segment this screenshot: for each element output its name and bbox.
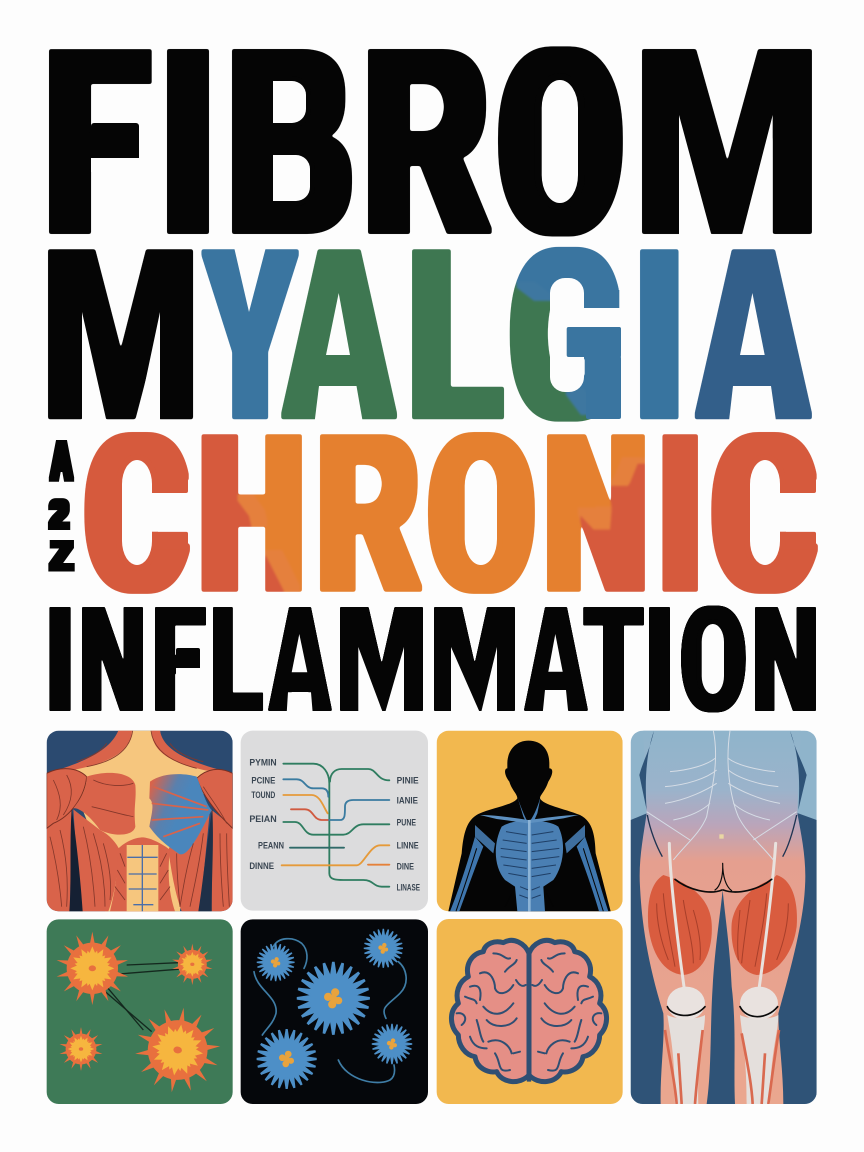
ribcage and nerves [496,820,563,911]
pectorals [73,773,136,835]
navy surround [631,813,817,1104]
immune cells [292,957,374,1039]
title line: INFLAMMATION: I [47,577,73,742]
title line: INFLAMMATION [47,576,818,743]
pathway labels: PEANN [258,840,284,850]
title line: CHRONIC: H [200,391,304,636]
pathway labels: LINASE [397,882,420,892]
title line: INFLAMMATION: L [212,578,262,742]
title line: MYALGIA: A [700,201,807,468]
pathway labels: TOUND [251,790,276,800]
pathway lines [282,764,389,887]
title line: INFLAMMATION: O [682,578,745,742]
title line: FIBROM: I [165,0,211,287]
body [640,731,805,1104]
panel: nerve pathway diagram [241,731,428,911]
pathway labels: DINNE [249,861,274,871]
title line: CHRONIC: N [546,390,646,637]
panel: inflamed cells on green [47,919,233,1104]
title line: FIBROM: R [366,0,486,287]
title line: MYALGIA: A [286,200,392,467]
pathway labels: PYMIN [249,758,277,768]
pathway labels: PINIE [397,776,419,786]
title line: CHRONIC: O [431,391,532,636]
pathway labels: PEIAN [249,814,277,824]
title line: INFLAMMATION: M [337,577,426,742]
title line: MYALGIA: M [40,201,201,467]
lower leg muscle stripes [665,1030,779,1104]
title line: CHRONIC: C [714,389,814,635]
hamstring muscles [648,875,712,975]
title line: MYALGIA: I [640,200,679,467]
arms and lats [47,810,72,911]
brain hemispheres [451,940,607,1082]
panel: brain [437,919,623,1104]
title line: FIBROM: O [501,0,620,287]
side word: small stacked letters: A [51,431,72,492]
connecting fibres [254,939,406,1082]
title line: FIBROM [47,0,822,287]
pathway labels: IANIE [397,795,418,805]
pathway labels: DINE [397,862,414,872]
pathway labels: LINNE [397,841,419,851]
title line: CHRONIC: C [87,389,186,636]
title line: INFLAMMATION: I [647,577,672,743]
fibre lines [50,731,229,907]
title line: FIBROM: B [230,0,351,287]
title line: INFLAMMATION: N [80,576,145,741]
panel: back, hamstrings and knees [631,731,817,1104]
title line: CHRONIC: I [661,390,699,636]
side word: small stacked letters [50,431,73,579]
connections between cells [104,962,190,1032]
title line: FIBROM: F [47,0,149,287]
black contour lines [667,863,778,1017]
pathway labels [249,758,420,892]
title line: INFLAMMATION: N [753,576,818,741]
title line: MYALGIA: G [513,202,620,468]
tendons and knees [669,843,776,987]
cells [56,932,129,1005]
title line: INFLAMMATION: T [586,576,641,741]
side word: small stacked letters: 2 [50,491,69,537]
panel: chest and shoulder muscles [47,731,233,911]
cream torso [67,731,210,911]
silhouette [448,741,611,911]
title line: FIBROM: M [632,0,822,286]
pathway labels: PCINE [251,775,275,785]
brain folds [457,953,601,1071]
side word: small stacked letters: Z [50,534,73,579]
title line: INFLAMMATION: A [270,577,330,742]
title line: INFLAMMATION: F [153,576,205,742]
panel: silhouette with nervous system [437,731,623,911]
pathway labels: PUNE [397,818,416,828]
title: FIBROMYALGIA AND CHRONIC INFLAMMATION [40,0,823,743]
title line: INFLAMMATION: M [431,577,518,742]
title line: CHRONIC [87,389,823,637]
deltoids [47,769,87,828]
title line: INFLAMMATION: A [526,577,586,742]
title line: MYALGIA: L [411,201,499,467]
title line: CHRONIC: R [319,389,417,636]
title line: MYALGIA: Y [208,202,292,468]
title line: MYALGIA [40,200,807,468]
abdominals [110,837,175,911]
panel: blue immune cells on black [241,919,428,1104]
